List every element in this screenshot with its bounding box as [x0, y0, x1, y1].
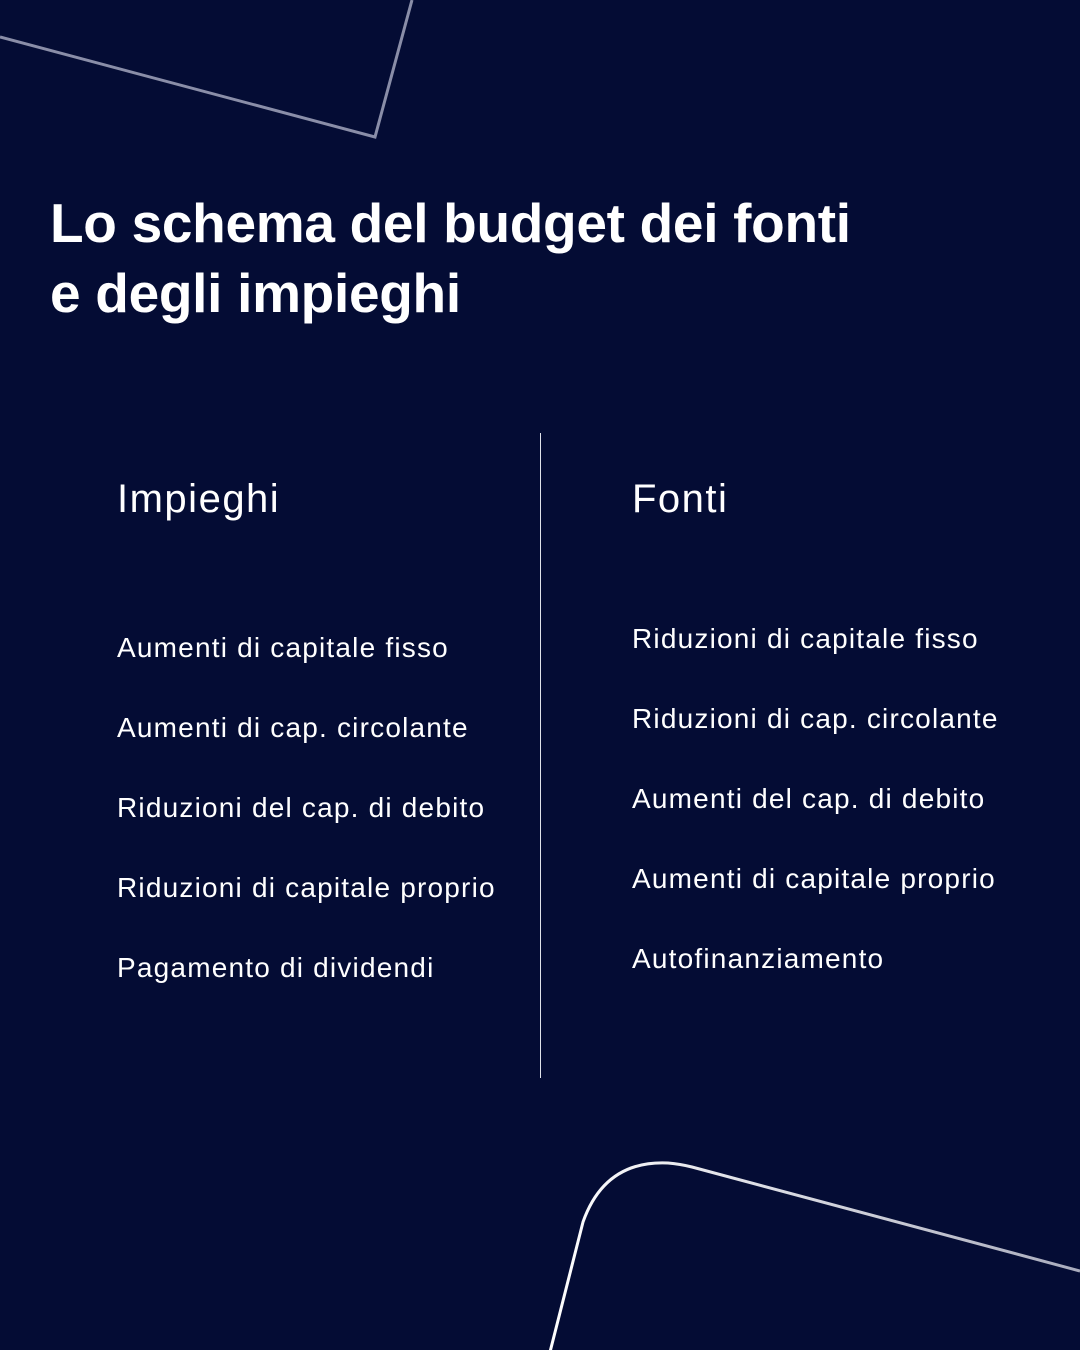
list: fonti: Aumenti di capitale proprio — [632, 863, 996, 894]
list: impieghi: Riduzioni di capitale proprio — [117, 872, 496, 903]
column: fonti — [632, 477, 999, 974]
title — [50, 192, 851, 324]
heading: Impieghi: Impieghi — [117, 477, 280, 521]
column: impieghi — [117, 477, 496, 983]
divider — [540, 433, 541, 1078]
heading: Fonti: Fonti — [632, 477, 728, 521]
list: fonti — [632, 623, 999, 974]
list: fonti: Riduzioni di cap. circolante — [632, 703, 999, 734]
list: fonti: Aumenti del cap. di debito — [632, 783, 985, 814]
list: fonti: Riduzioni di capitale fisso — [632, 623, 979, 654]
title: e degli impieghi — [50, 262, 461, 324]
list: fonti: Autofinanziamento — [632, 943, 884, 974]
list: impieghi: Pagamento di dividendi — [117, 952, 434, 983]
list: impieghi: Riduzioni del cap. di debito — [117, 792, 485, 823]
title: Lo schema del budget dei fonti — [50, 192, 851, 254]
list: impieghi: Aumenti di capitale fisso — [117, 632, 449, 663]
list: impieghi — [117, 632, 496, 983]
list: impieghi: Aumenti di cap. circolante — [117, 712, 469, 743]
